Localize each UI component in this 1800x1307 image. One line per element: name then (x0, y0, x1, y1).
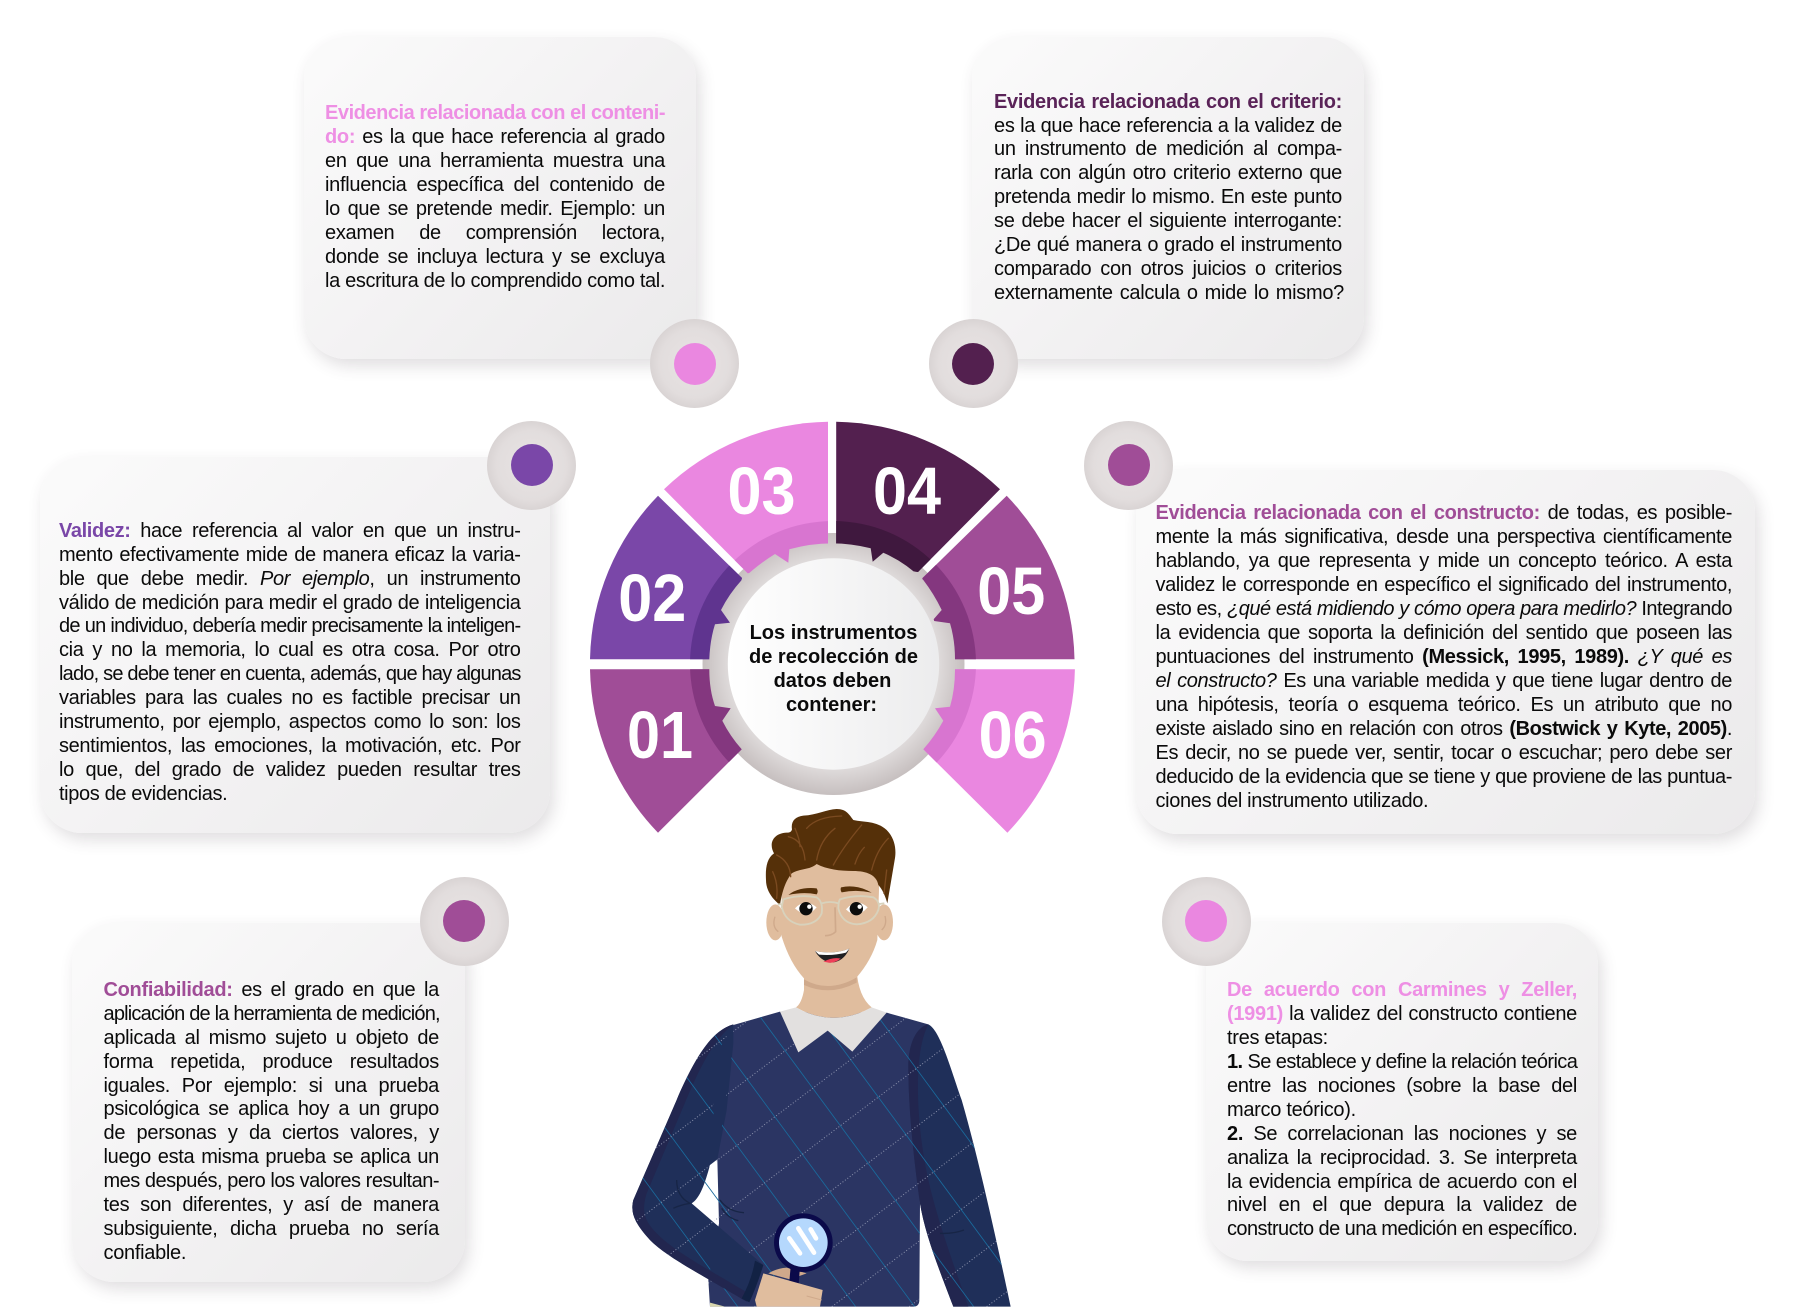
text: carmines y zeller: tres etapas: (1227, 1027, 1328, 1049)
segment 03 (664, 422, 828, 574)
nose (825, 907, 836, 936)
segment 06 (923, 669, 1075, 833)
text: evidencia criterio: un instrumento de medición al compa- (994, 138, 1342, 160)
text: evidencia contenido: do: es la que hace referencia al grado (325, 126, 665, 148)
panel: carmines y zeller (1206, 923, 1598, 1261)
text: evidencia constructo: esto es, ¿qué está midiendo y cómo opera para medirlo? Integrando (1156, 598, 1732, 620)
text: confiabilidad: mes después, pero los valores resultan- (104, 1170, 439, 1192)
ears (766, 904, 893, 940)
segment 05 (922, 496, 1074, 660)
text: carmines y zeller: nivel en el que depura la validez de (1227, 1194, 1577, 1216)
text: confiabilidad: de personas y da ciertos valores, y (104, 1122, 439, 1144)
text: evidencia contenido: donde se incluya lectura y se excluya (325, 246, 665, 268)
text: evidencia constructo: ciones del instrumento utilizado. (1156, 790, 1428, 812)
sleeve right (908, 1024, 1011, 1307)
text: validez: lado, se debe tener en cuenta, además, que hay algunas (59, 663, 521, 685)
text: carmines y zeller: constructo de una medición en específico. (1227, 1218, 1577, 1240)
text: evidencia contenido (325, 102, 666, 292)
sleeve wrinkles (673, 1180, 964, 1233)
text: evidencia criterio: pretenda medir lo mismo. En este punto (994, 186, 1342, 208)
thumb (768, 1268, 807, 1279)
text: evidencia constructo: la evidencia que soporta la definición del sentido que poseen las (1156, 622, 1732, 644)
panel: evidencia constructo (1136, 470, 1755, 834)
text: carmines y zeller: 2. Se correlacionan las nociones y se (1227, 1123, 1577, 1145)
center title: datos deben (774, 670, 891, 692)
text: evidencia criterio: externamente calcula o mide lo mismo? (994, 282, 1344, 304)
text: evidencia constructo: mente la más significativa, desde una perspectiva científicamente (1156, 526, 1732, 548)
text: confiabilidad: forma repetida, produce resultados (104, 1051, 439, 1073)
text: evidencia contenido: examen de comprensión lectora, (325, 222, 665, 244)
center title (749, 622, 918, 716)
text: carmines y zeller: marco teórico). (1227, 1099, 1356, 1121)
text: evidencia criterio: ¿De qué manera o grado el instrumento (994, 234, 1342, 256)
dot: carmines y zeller (1162, 876, 1250, 966)
text: evidencia constructo: el constructo? Es una variable medida y que tiene lugar dentro de (1156, 670, 1732, 692)
gear (709, 543, 955, 786)
text: confiabilidad: iguales. Por ejemplo: si una prueba (104, 1075, 439, 1097)
text: evidencia constructo: puntuaciones del instrumento (Messick, 1995, 1989). ¿Y qué es (1156, 646, 1732, 668)
text: evidencia criterio: comparado con otros juicios o criterios (994, 258, 1342, 280)
text: validez: variables para las cuales no es factible precisar un (59, 687, 520, 709)
text: confiabilidad: aplicada al mismo sujeto u objeto de (104, 1027, 439, 1049)
text: confiabilidad: subsiguiente, dicha prueba no sería (104, 1218, 439, 1240)
text: validez: tipos de evidencias. (59, 783, 227, 805)
segment numbers: 05 (977, 554, 1045, 629)
base ring (702, 533, 964, 795)
text: validez: mento efectivamente mide de manera eficaz la varia- (59, 544, 520, 566)
text: evidencia constructo: Evidencia relacionada con el constructo: de todas, es posible- (1156, 502, 1732, 524)
text: validez: cia y no la memoria, lo cual es otra cosa. Por otro (59, 639, 520, 661)
center title: de recolección de (749, 646, 918, 668)
panel: validez (40, 457, 550, 833)
text: evidencia constructo: validez le corresponde en específico el significado del instrumento, (1156, 574, 1732, 596)
text: evidencia criterio: es la que hace referencia a la validez de (994, 115, 1342, 137)
segment numbers: 04 (873, 454, 941, 529)
dot: criterio (928, 319, 1018, 408)
text: validez: sentimientos, las emociones, la motivación, etc. Por (59, 735, 520, 757)
segment numbers: 02 (618, 561, 686, 636)
text: confiabilidad: luego esta misma prueba se aplica un (104, 1146, 439, 1168)
text: confiabilidad: Confiabilidad: es el grado en que la (104, 979, 439, 1001)
text: evidencia contenido: en que una herramienta muestra una (325, 150, 665, 172)
collar (780, 1007, 887, 1052)
text: evidencia contenido: Evidencia relacionada con el conteni- (325, 102, 665, 124)
text: validez: Validez: hace referencia al valor en que un instru- (59, 520, 520, 542)
dot: validez (487, 421, 576, 510)
hair (766, 809, 895, 905)
dot: constructo (1084, 421, 1173, 510)
panel: evidencia criterio (972, 37, 1364, 359)
cuff (742, 1261, 763, 1302)
segment 02 (590, 496, 742, 660)
center title: contener: (786, 694, 877, 716)
segment numbers: 06 (979, 698, 1047, 773)
segment 01 (590, 669, 742, 833)
segment 04 (836, 422, 1000, 572)
panel: evidencia contenido (304, 37, 696, 359)
donut chart: numbered segments with central gear (590, 422, 1075, 833)
mouth (815, 949, 849, 963)
dot: contenido (650, 319, 739, 408)
text: validez: de un individuo, debería medir precisamente la inteligen- (59, 615, 520, 637)
magnifying glass (774, 1213, 833, 1284)
text: confiabilidad: aplicación de la herramienta de medición, (104, 1003, 440, 1025)
text: validez: instrumento, por ejemplo, aspectos como lo son: los (59, 711, 520, 733)
text: carmines y zeller (1227, 979, 1578, 1240)
segment numbers: 03 (728, 454, 796, 529)
text: evidencia contenido: la escritura de lo comprendido como tal. (325, 270, 665, 292)
hand (755, 1273, 823, 1307)
neck (796, 970, 872, 1018)
text: carmines y zeller: entre las nociones (sobre la base del (1227, 1075, 1577, 1097)
sleeve left (632, 1024, 763, 1302)
text: evidencia criterio: rarla con algún otro criterio externo que (994, 162, 1342, 184)
text: evidencia constructo: deducido de la evidencia que se tiene y que proviene de las puntua- (1156, 766, 1732, 788)
segment numbers (618, 454, 1047, 773)
segment numbers: 01 (627, 698, 693, 773)
panel: confiabilidad (72, 923, 465, 1282)
text: validez: ble que debe medir. Por ejemplo, un instrumento (59, 568, 520, 590)
glasses (778, 896, 884, 925)
text: evidencia constructo: existe aislado sino en relación con otros (Bostwick y Kyte, 2005). (1156, 718, 1732, 740)
text: carmines y zeller: 1. Se establece y define la relación teórica (1227, 1051, 1577, 1073)
text: evidencia contenido: lo que se pretende medir. Ejemplo: un (325, 198, 665, 220)
text: carmines y zeller: analiza la reciprocidad. 3. Se interpreta (1227, 1147, 1577, 1169)
center circle (728, 558, 939, 770)
text: carmines y zeller: (1991) la validez del constructo contiene (1227, 1003, 1577, 1025)
pants (710, 1303, 725, 1307)
center title: Los instrumentos (750, 622, 917, 644)
illustration: man with magnifying glass (632, 809, 1011, 1307)
argyle lines (637, 1016, 1007, 1306)
text: evidencia criterio: se debe hacer el siguiente interrogante: (994, 210, 1342, 232)
text: evidencia criterio: Evidencia relacionada con el criterio: (994, 91, 1342, 113)
text: validez: válido de medición para medir el grado de inteligencia (59, 592, 520, 614)
text: evidencia constructo (1156, 502, 1732, 812)
eyebrows (788, 888, 818, 895)
text: evidencia criterio (994, 91, 1344, 304)
text: evidencia constructo: hablando, ya que representa y mide un concepto teórico. A esta (1156, 550, 1732, 572)
text: confiabilidad: confiable. (104, 1242, 186, 1264)
text: evidencia constructo: Es decir, no se puede ver, sentir, tocar o escuchar; pero debe ser (1156, 742, 1732, 764)
dot: confiabilidad (420, 876, 508, 966)
eyes (795, 902, 868, 915)
text: carmines y zeller: la evidencia empírica de acuerdo con el (1227, 1170, 1577, 1192)
text: validez (59, 520, 521, 805)
text: validez: lo que, del grado de validez pueden resultar tres (59, 759, 520, 781)
text: evidencia constructo: una hipótesis, teoría o esquema teórico. Es un atributo que no (1156, 694, 1732, 716)
text: carmines y zeller: De acuerdo con Carmines y Zeller, (1227, 979, 1577, 1001)
text: confiabilidad: tes son diferentes, y así de manera (104, 1194, 439, 1216)
text: evidencia contenido: influencia específica del contenido de (325, 174, 665, 196)
text: confiabilidad (104, 979, 440, 1264)
torso (708, 1012, 928, 1307)
text: confiabilidad: psicológica se aplica hoy a un grupo (104, 1098, 439, 1120)
face (782, 857, 879, 986)
